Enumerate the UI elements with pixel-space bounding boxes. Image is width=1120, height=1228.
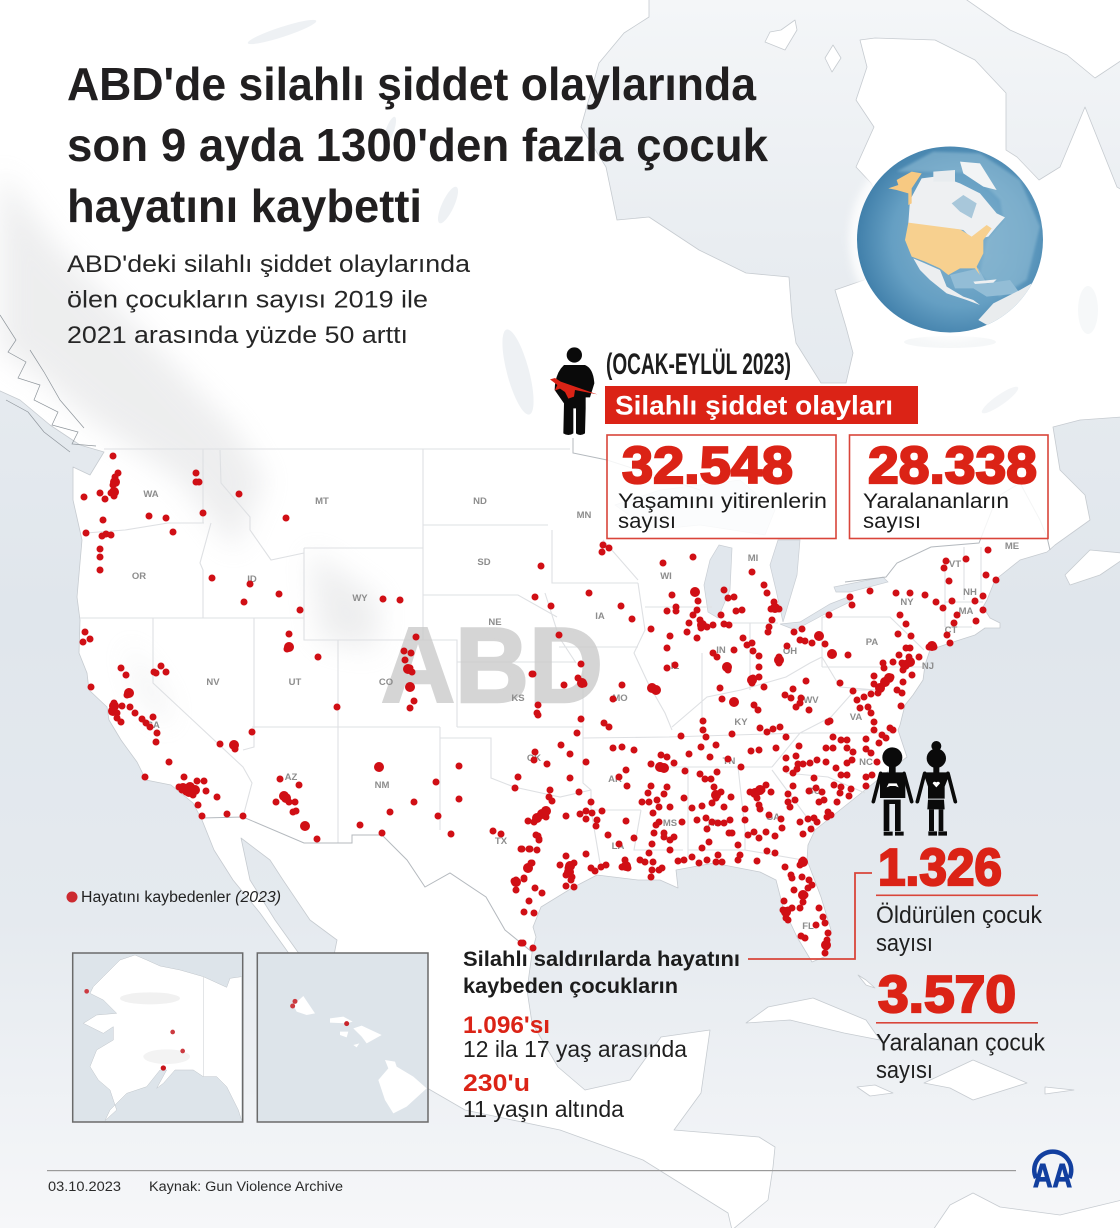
title bbox=[67, 58, 768, 232]
map: incident dots bbox=[83, 456, 996, 953]
text block: ages of children: 1.096'sı bbox=[463, 1012, 550, 1039]
stat box: injured: 28.338 bbox=[868, 437, 1037, 495]
state labels: IA bbox=[595, 611, 605, 622]
stat: injured children: Yaralanan çocuk bbox=[876, 1030, 1046, 1056]
state labels: MO bbox=[612, 693, 628, 704]
subtitle: 2021 arasında yüzde 50 arttı bbox=[67, 322, 408, 349]
legend: Hayatını kaybedenler (2023) bbox=[81, 889, 281, 906]
state labels: GA bbox=[766, 812, 780, 823]
subtitle: ABD'deki silahlı şiddet olaylarında bbox=[67, 251, 471, 278]
state labels: MS bbox=[663, 818, 677, 829]
stat box: deaths: Yaşamını yitirenlerin bbox=[618, 490, 827, 513]
state labels: VT bbox=[949, 559, 961, 570]
state labels: FL bbox=[802, 921, 814, 932]
stat box: injured bbox=[850, 435, 1048, 538]
globe bbox=[849, 146, 1043, 332]
state labels: OK bbox=[527, 753, 541, 764]
title: son 9 ayda 1300'den fazla çocuk bbox=[67, 119, 768, 171]
state labels: UT bbox=[289, 677, 302, 688]
state labels: AL bbox=[708, 818, 721, 829]
state labels: ND bbox=[473, 496, 487, 507]
state labels: WV bbox=[803, 695, 819, 706]
state labels: OH bbox=[783, 646, 797, 657]
state labels: SD bbox=[477, 557, 491, 568]
state labels: LA bbox=[612, 841, 624, 852]
stat: killed children bbox=[876, 839, 1043, 957]
stat: killed children: sayısı bbox=[876, 930, 933, 957]
state labels: WA bbox=[143, 489, 159, 500]
state labels: TN bbox=[723, 756, 735, 767]
state labels: WY bbox=[352, 593, 368, 604]
footer: date and source bbox=[48, 1179, 343, 1194]
stat box: deaths bbox=[607, 435, 836, 538]
stat box: injured: sayısı bbox=[863, 510, 921, 533]
inset map: Alaska bbox=[73, 953, 243, 1122]
stat box: deaths: sayısı bbox=[618, 510, 676, 533]
stat: injured children: 3.570 bbox=[878, 966, 1016, 1024]
state labels: CO bbox=[379, 677, 393, 688]
state labels: AZ bbox=[285, 772, 298, 783]
state labels: MN bbox=[577, 510, 592, 521]
state labels: SC bbox=[807, 786, 821, 797]
state labels: VA bbox=[850, 712, 862, 723]
text block: ages of children: 12 ila 17 yaş arasında bbox=[463, 1036, 687, 1062]
stat: killed children: 1.326 bbox=[878, 839, 1002, 897]
text block: ages of children: 230'u bbox=[463, 1070, 530, 1097]
icon: two children bbox=[873, 747, 912, 836]
stat box: deaths: 32.548 bbox=[622, 437, 793, 495]
state labels: OR bbox=[132, 571, 146, 582]
footer rule bbox=[47, 1170, 1016, 1171]
state labels: CT bbox=[945, 625, 958, 636]
callout connector line bbox=[748, 873, 872, 959]
state labels: CA bbox=[146, 720, 160, 731]
state labels: NC bbox=[859, 757, 873, 768]
watermark: ABD: ABD bbox=[381, 605, 603, 725]
footer: date and source: Kaynak: Gun Violence Archive bbox=[149, 1179, 343, 1194]
state labels: IL bbox=[671, 661, 679, 672]
subtitle: ölen çocukların sayısı 2019 ile bbox=[67, 286, 428, 314]
title: hayatını kaybetti bbox=[67, 180, 422, 232]
heading bar: Silahlı şiddet olayları: Silahlı şiddet olayları bbox=[615, 390, 893, 420]
map: international border bbox=[202, 438, 1050, 952]
state labels: ME bbox=[1005, 541, 1019, 552]
footer: date and source: 03.10.2023 bbox=[48, 1179, 121, 1194]
state labels: IN bbox=[716, 645, 726, 656]
state labels: NH bbox=[963, 587, 977, 598]
map: mountain shading bbox=[0, 170, 380, 730]
map: state borders bbox=[80, 449, 983, 863]
state labels: KY bbox=[734, 717, 748, 728]
inset map: Hawaii bbox=[257, 953, 428, 1122]
state labels: TX bbox=[495, 836, 508, 847]
state labels: MT bbox=[315, 496, 329, 507]
text block: ages of children: Silahlı saldırılarda hayatını bbox=[463, 948, 740, 971]
icon: person with gun bbox=[550, 347, 597, 435]
state labels: MI bbox=[748, 553, 758, 564]
state labels: PA bbox=[866, 637, 878, 648]
logo: AA: AA bbox=[1033, 1157, 1072, 1194]
subtitle bbox=[67, 251, 471, 349]
heading bar: Silahlı şiddet olayları bbox=[605, 386, 918, 424]
state labels: WI bbox=[660, 571, 672, 582]
icon: girl bbox=[917, 741, 955, 836]
state labels: NJ bbox=[922, 661, 934, 672]
stat: injured children: sayısı bbox=[876, 1057, 933, 1084]
state labels: NV bbox=[206, 677, 220, 688]
state labels bbox=[132, 489, 1019, 932]
text block: ages of children: 11 yaşın altında bbox=[463, 1096, 624, 1122]
state labels: NM bbox=[375, 780, 389, 791]
icon: boy bbox=[873, 747, 912, 836]
stat: injured children bbox=[876, 966, 1046, 1084]
state labels: NY bbox=[900, 597, 914, 608]
state labels: NE bbox=[488, 617, 502, 628]
state labels: KS bbox=[511, 693, 525, 704]
period label: (OCAK-EYLÜL 2023) bbox=[606, 348, 791, 381]
state labels: ID bbox=[247, 574, 257, 585]
state labels: MA bbox=[959, 606, 974, 617]
map: coastal fjords bbox=[0, 315, 96, 452]
stat: killed children: Öldürülen çocuk bbox=[876, 902, 1043, 929]
map: Great Lakes bbox=[615, 480, 888, 630]
text block: ages of children: kaybeden çocukların bbox=[463, 975, 678, 998]
map: lakes and hydrography bbox=[246, 16, 1098, 417]
stat box: injured: Yaralananların bbox=[863, 490, 1009, 513]
state labels: AR bbox=[608, 774, 622, 785]
text block: ages of children bbox=[463, 948, 740, 1122]
title: ABD'de silahlı şiddet olaylarında bbox=[67, 58, 756, 110]
